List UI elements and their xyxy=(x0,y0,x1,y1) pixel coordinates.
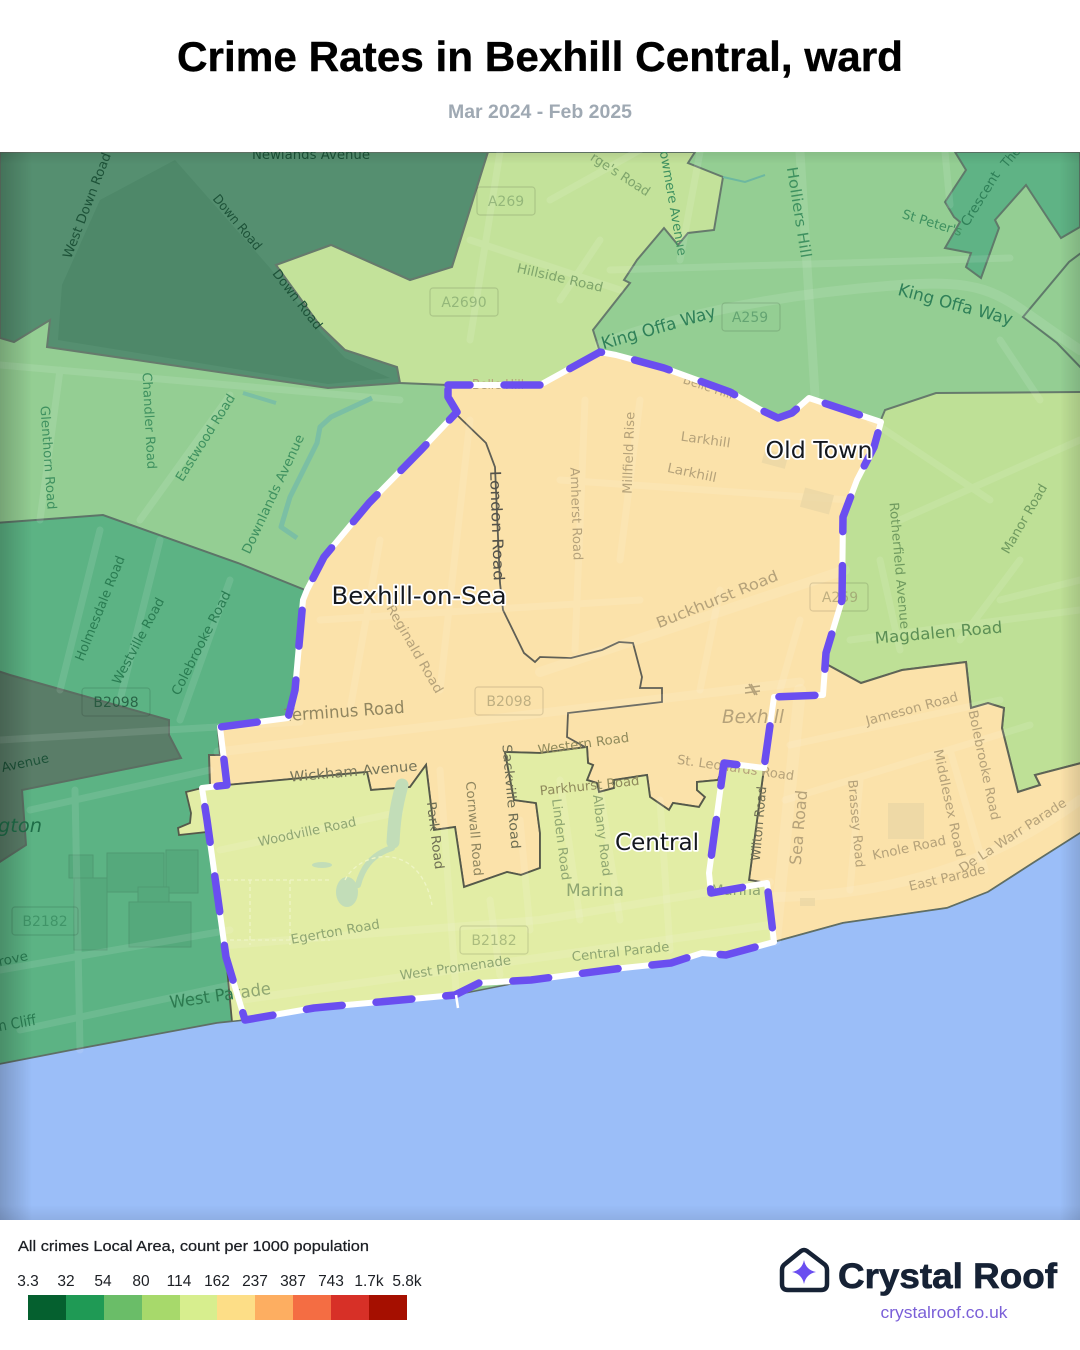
road labels: town centre: Wilton Road xyxy=(749,786,770,862)
road labels: north-west xyxy=(36,148,370,557)
region: north-east area divider xyxy=(1023,250,1080,372)
road labels: north-west: Glenthorn Road xyxy=(36,405,59,510)
legend scale values: 54 xyxy=(94,1273,112,1290)
park paths xyxy=(220,857,432,945)
road labels: north-west: Down Road xyxy=(209,192,264,254)
shield: B2098 west xyxy=(82,688,150,716)
road labels: Bexhill north: Millfield Rise xyxy=(621,412,638,494)
road labels: east: Bolebrooke Road xyxy=(964,709,1002,822)
legend scale values: 162 xyxy=(204,1273,230,1290)
road labels: seafront and park: West Promenade xyxy=(399,953,512,984)
legend scale values xyxy=(17,1273,422,1290)
road labels: north: rge's Road xyxy=(587,150,653,200)
road labels: north-west: West Down Road xyxy=(61,151,115,261)
legend scale values: 743 xyxy=(318,1273,344,1290)
road labels: seafront and park: Woodville Road xyxy=(257,815,358,850)
road labels: east: Knole Road xyxy=(871,833,948,864)
region: orange Bexhill north and east xyxy=(209,352,1080,942)
region: yellow Central ward area xyxy=(178,747,774,1022)
road labels: north-west: Downlands Avenue xyxy=(240,432,308,557)
road labels: town centre: Wickham Avenue xyxy=(289,758,418,786)
road labels: Bexhill north: Reginald Road xyxy=(383,602,446,696)
road labels: north-west: Down Road xyxy=(269,267,325,333)
map edge shading xyxy=(0,152,1080,1220)
legend scale values: 3.3 xyxy=(17,1273,39,1290)
legend scale values: 80 xyxy=(132,1273,150,1290)
legend scale values: 114 xyxy=(167,1273,192,1290)
shield: B2182 central xyxy=(460,926,528,954)
road labels: north-west: Chandler Road xyxy=(138,372,159,470)
road labels: town centre: Parkhurst Road xyxy=(539,774,640,799)
ward boundary: white casing xyxy=(202,352,881,1020)
region: dark grey-green west area xyxy=(0,670,181,865)
road labels: seafront and park: Egerton Road xyxy=(290,917,381,948)
icon: house with star xyxy=(782,1250,827,1290)
legend xyxy=(17,1238,422,1320)
shield: A269 xyxy=(477,187,535,215)
road labels: town centre: St. Leonards Road xyxy=(676,753,795,784)
road labels: seafront and park: Central Parade xyxy=(571,940,670,965)
road labels: east: East Parade xyxy=(908,863,987,895)
legend heading: All crimes Local Area, count per 1000 population xyxy=(18,1238,369,1255)
road labels: town centre: Marina xyxy=(566,881,624,901)
road labels: Bexhill north: Terminus Road xyxy=(283,698,405,726)
subtitle: date range: Mar 2024 - Feb 2025 xyxy=(448,102,632,123)
road labels: north-west: Eastwood Road xyxy=(173,392,239,485)
road labels: south-west: Holmesdale Road xyxy=(73,554,129,663)
road labels: town centre: Western Road xyxy=(537,731,630,758)
road labels: Bexhill north: Belle Hill xyxy=(681,373,735,403)
inner boundary: London Road to Western Road line xyxy=(457,415,662,747)
stream: top channel xyxy=(723,175,765,182)
road labels: north: Hillside Road xyxy=(515,261,604,296)
road labels: town centre xyxy=(289,706,795,901)
legend scale values: 32 xyxy=(57,1273,75,1290)
road labels: east: Manor Road xyxy=(999,482,1051,557)
road labels: north: St Peter's xyxy=(900,207,964,240)
road labels: Bexhill north xyxy=(283,373,781,726)
road labels: seafront and park xyxy=(168,815,670,1013)
road labels: Bexhill north: Larkhill xyxy=(666,461,718,486)
road labels: north: Holliers Hill xyxy=(783,165,815,259)
road labels: north: owmere Avenue xyxy=(656,150,689,257)
shield: A259 north xyxy=(722,303,780,331)
shield: A259 east xyxy=(810,583,868,611)
building: orange-area pale blocks xyxy=(762,449,924,906)
legend scale values: 237 xyxy=(242,1273,268,1290)
road labels: north: The xyxy=(998,145,1024,172)
road labels: east: Middlesex Road xyxy=(930,748,967,859)
stream: Eastwood Road section xyxy=(243,393,276,403)
road labels: east: De La Warr Parade xyxy=(957,796,1070,876)
road labels: town centre: Linden Road xyxy=(548,798,573,881)
place label: Old Town: Old Town xyxy=(766,438,872,464)
road labels: east: Jameson Road xyxy=(863,690,960,729)
road labels: south-west: Colebrooke Road xyxy=(169,589,235,698)
road labels: north: King Offa Way xyxy=(599,302,718,354)
road labels: seafront and park: West Parade xyxy=(168,979,272,1013)
road labels: north: Crescent xyxy=(958,169,1004,229)
road labels: east: Sea Road xyxy=(786,789,811,866)
park pond xyxy=(312,785,402,907)
road labels: south-west: Westville Road xyxy=(110,595,168,687)
legend colour ramp xyxy=(28,1295,407,1320)
logo: Crystal Roof xyxy=(782,1250,1057,1322)
shield: B2098 central: B2098 xyxy=(486,694,532,710)
region: St Peter's Crescent area xyxy=(945,152,1080,278)
shield: A259 east: A259 xyxy=(822,590,858,606)
place label: Central: Central xyxy=(615,830,699,856)
region: darkest interior of north-west area xyxy=(58,160,390,384)
shield: B2182 west xyxy=(12,907,78,935)
road labels: town centre: Cornwall Road xyxy=(462,781,485,877)
road labels: south-west: Avenue xyxy=(0,751,50,776)
road labels: east: Brassey Road xyxy=(844,779,867,868)
road labels: south-west xyxy=(0,554,235,1035)
road labels: north: King Offa Way xyxy=(896,280,1015,330)
road labels: east: Magdalen Road xyxy=(874,617,1003,648)
road labels: east xyxy=(786,482,1070,895)
road network xyxy=(0,150,1080,1050)
shield: A2690: A2690 xyxy=(441,295,487,311)
ward boundary: purple dashes xyxy=(202,352,881,1020)
road labels: Bexhill north: Larkhill xyxy=(680,430,731,451)
legend scale values: 387 xyxy=(280,1273,306,1290)
region: south-west green area xyxy=(0,515,310,1065)
website link text: crystalroof.co.uk xyxy=(880,1304,1008,1322)
shield: A259 north: A259 xyxy=(732,310,768,326)
shield: B2098 central xyxy=(475,687,543,715)
legend scale values: 1.7k xyxy=(354,1273,384,1290)
road labels: town centre: Bexhill xyxy=(722,706,785,728)
road labels: east: Rotherfield Avenue xyxy=(885,502,911,630)
road labels: town centre: Park Road xyxy=(423,801,446,870)
stream: north of Downlands Avenue xyxy=(281,398,372,538)
small spur at the promenade xyxy=(456,995,458,1008)
sea xyxy=(0,830,1080,1225)
road labels: north xyxy=(515,145,1024,354)
region: dark north-west area xyxy=(0,152,488,388)
region: yellow-green north area xyxy=(276,152,723,385)
shield: B2182 west: B2182 xyxy=(22,914,68,930)
place label: Bexhill-on-Sea: Bexhill-on-Sea xyxy=(332,582,506,610)
icon: railway station xyxy=(745,684,760,695)
shield: A2690 xyxy=(430,288,498,316)
road labels: Bexhill north: London Road xyxy=(486,471,508,581)
road labels: Bexhill north: Belle Hill xyxy=(472,378,524,393)
road labels: Bexhill north: Buckhurst Road xyxy=(653,567,781,632)
region: east green area xyxy=(826,392,1080,792)
buildings: school blocks xyxy=(69,850,198,950)
map base: mid green area xyxy=(0,152,1080,992)
logo wordmark: Crystal Roof xyxy=(838,1257,1057,1296)
shield: B2182 central: B2182 xyxy=(471,933,517,949)
road labels: town centre: Marina xyxy=(711,883,761,899)
shield: A269: A269 xyxy=(488,194,524,210)
legend scale values: 5.8k xyxy=(392,1273,422,1290)
title: Crime Rates in Bexhill Central, ward xyxy=(177,33,903,80)
road labels: town centre: Albany Road xyxy=(589,794,614,877)
road labels: north-west: Newlands Avenue xyxy=(252,148,370,163)
road labels: Bexhill north: Amherst Road xyxy=(566,467,585,561)
shield: B2098 west: B2098 xyxy=(93,695,139,711)
road labels: town centre: Sackville Road xyxy=(498,744,523,850)
